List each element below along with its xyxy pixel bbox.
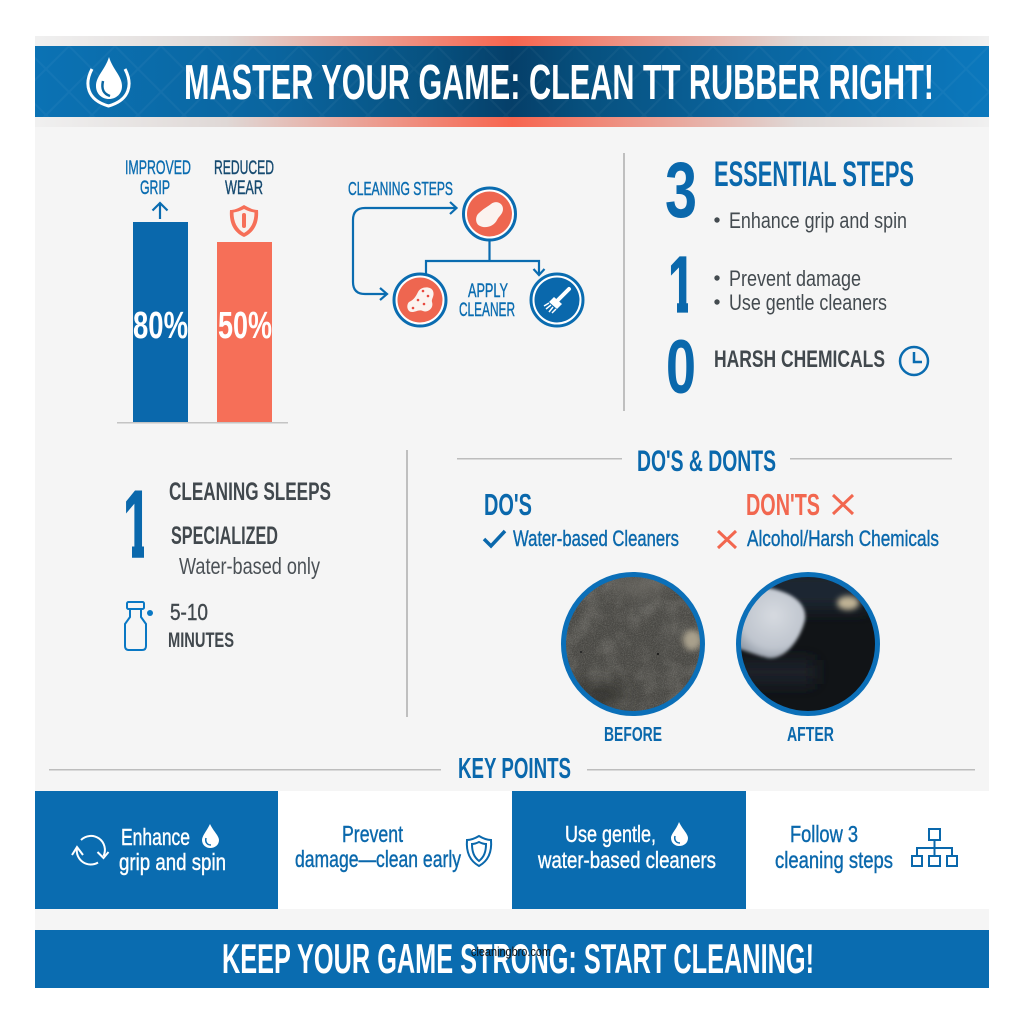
big number 1: 1 (123, 471, 151, 578)
card: follow steps: cleaning steps (775, 847, 893, 873)
card: gentle cleaners (512, 791, 746, 909)
step label: apply cleaner: CLEANER (459, 300, 515, 321)
label: reduced wear: REDUCED (214, 158, 274, 179)
section heading: DO'S & DONTS (637, 445, 776, 478)
step icon: brush (531, 274, 583, 326)
harsh chemicals: HARSH CHEMICALS (714, 346, 885, 373)
label: after: AFTER (787, 724, 834, 746)
icon: bottle (125, 602, 153, 650)
cleaning sleeps: CLEANING SLEEPS (169, 478, 331, 506)
card: prevent damage: damage—clean early (295, 846, 461, 872)
step icon: scrubber (394, 274, 446, 326)
step label: apply cleaner: APPLY (468, 281, 508, 302)
photo: before (560, 572, 706, 716)
card: prevent damage: Prevent (342, 821, 403, 847)
card: follow steps (746, 791, 989, 909)
flow diagram: cleaning steps (348, 179, 583, 326)
panel: essential steps (666, 161, 930, 394)
big number 0: 0 (666, 325, 696, 410)
icon: sync arrows (72, 836, 108, 865)
label: improved grip (125, 158, 191, 199)
panel: cleaning summary (123, 471, 331, 652)
bar: reduced wear 50%: 50% (218, 305, 272, 347)
don't item (718, 526, 939, 551)
watermark text: cleaningbro.com (471, 945, 551, 959)
card: enhance grip: Enhance (121, 824, 190, 850)
step label: apply cleaner (459, 281, 515, 321)
time: 5-10 minutes: MINUTES (168, 629, 234, 652)
icon: up arrow (152, 203, 168, 219)
icon: water drop (88, 57, 129, 106)
bullets: prevent damage: Prevent damage (729, 266, 861, 291)
do's heading: DO'S (484, 487, 532, 522)
footer banner (35, 930, 989, 988)
don'ts heading: DON'TS (746, 487, 820, 522)
big number 3: 3 (665, 145, 697, 234)
key point cards (35, 791, 989, 909)
label: improved grip: GRIP (140, 178, 170, 199)
icon: drop (671, 822, 688, 846)
card: follow steps: Follow 3 (790, 821, 858, 847)
time: 5-10 minutes: 5-10 (170, 599, 208, 625)
icon: shield (467, 836, 491, 866)
label: before: BEFORE (604, 724, 662, 746)
icon: clock (900, 347, 928, 375)
flow arrows (353, 202, 544, 300)
time: 5-10 minutes (168, 599, 234, 652)
content panel background (35, 117, 989, 930)
do item: Water-based Cleaners (513, 526, 679, 551)
card: prevent damage (278, 791, 512, 909)
bar: improved grip 80% (133, 222, 188, 422)
icon: drop (202, 824, 219, 848)
photo: after (735, 570, 878, 714)
flow heading: CLEANING STEPS (348, 179, 453, 199)
label: improved grip: IMPROVED (125, 158, 191, 179)
do item (484, 526, 679, 551)
bullets: prevent damage (714, 266, 887, 315)
header banner (35, 36, 989, 127)
panel: do's and don'ts (457, 445, 952, 746)
axis line (117, 422, 288, 424)
label: reduced wear (214, 158, 274, 199)
icon: shield (230, 205, 258, 237)
don't item: Alcohol/Harsh Chemicals (747, 526, 939, 551)
icon: hierarchy (912, 829, 957, 866)
big number 1: 1 (668, 240, 695, 329)
divider (623, 153, 625, 411)
key points heading: KEY POINTS (458, 753, 571, 785)
bar chart (117, 158, 288, 424)
card: gentle cleaners: Use gentle, (565, 821, 656, 847)
bullets: prevent damage: Use gentle cleaners (729, 290, 887, 315)
specialized: SPECIALIZED (171, 522, 278, 550)
label: reduced wear: WEAR (225, 178, 263, 199)
bar: improved grip 80%: 80% (133, 305, 188, 347)
bullet: enhance grip: Enhance grip and spin (729, 208, 907, 233)
step icon: sponge (464, 188, 516, 240)
water-based only: Water-based only (179, 553, 320, 579)
card: enhance grip (35, 791, 278, 909)
card: gentle cleaners: water-based cleaners (537, 847, 716, 873)
bar: reduced wear 50% (217, 242, 272, 422)
card: enhance grip: grip and spin (119, 849, 226, 875)
divider (406, 450, 408, 717)
